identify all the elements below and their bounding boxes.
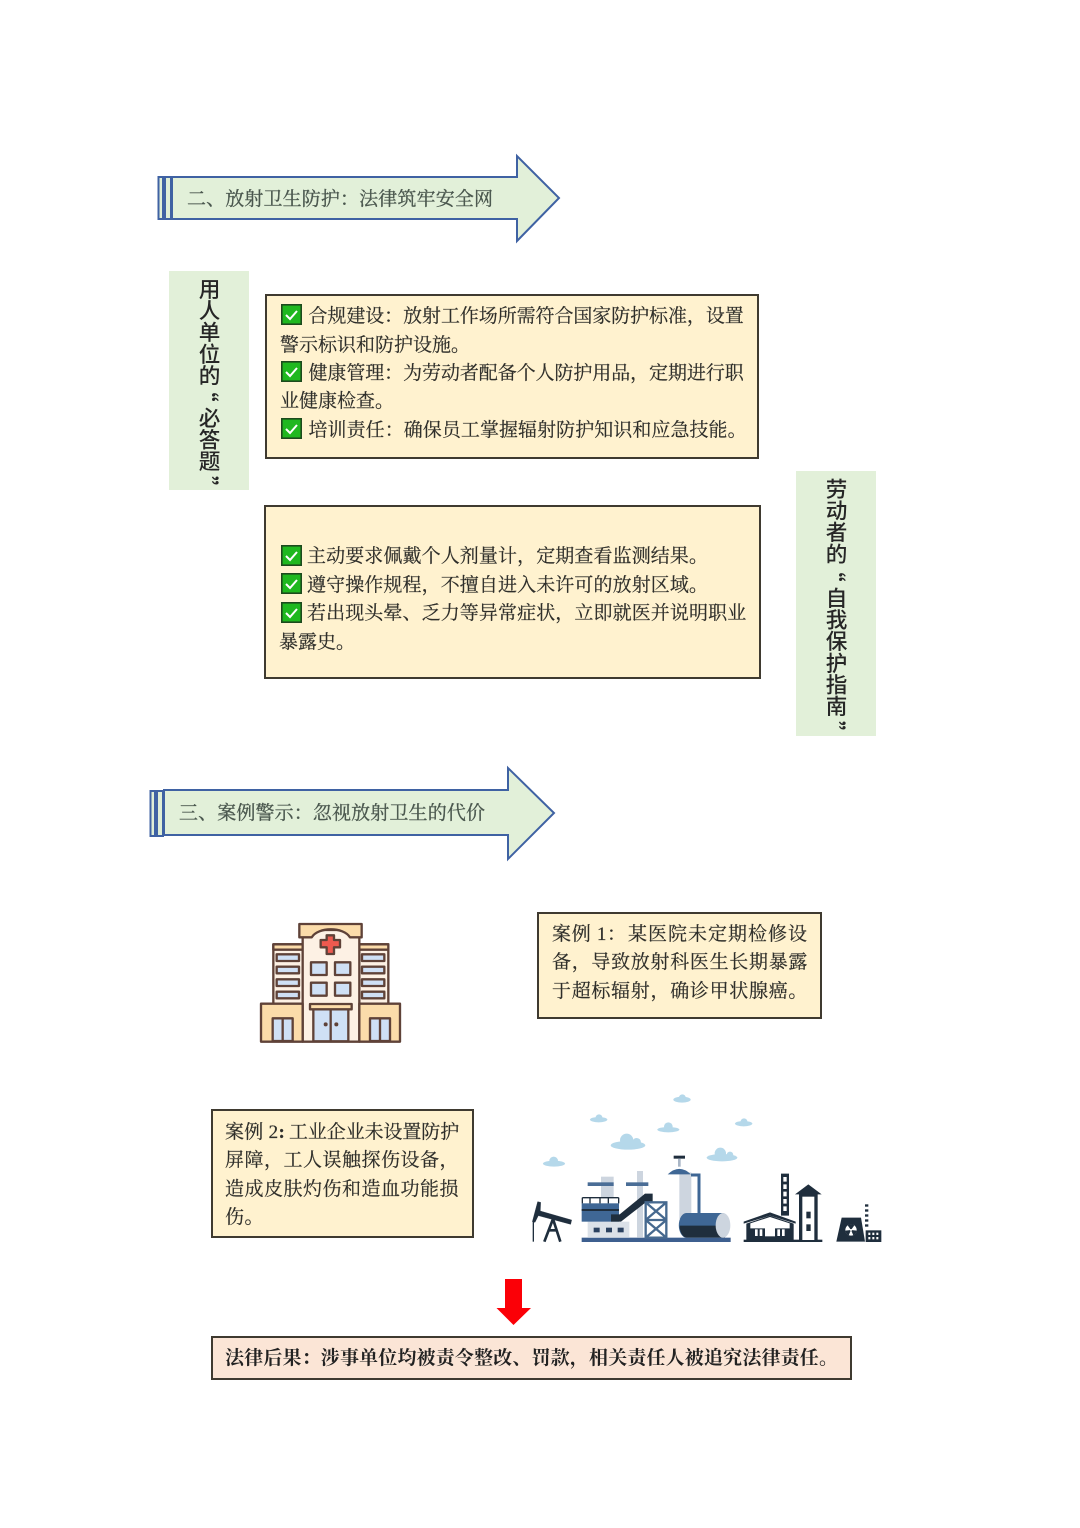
icon: clouds: [543, 1094, 752, 1167]
closing quote: worker: ”: [820, 721, 851, 743]
text line: health management continued: 业健康检查。: [280, 391, 394, 412]
text line: compliance continued: 警示标识和防护设施。: [280, 335, 470, 356]
icon: hospital: [260, 922, 402, 1043]
vertical label text: worker second part: 自我保护指南: [823, 587, 848, 717]
heading text: section two: 二、放射卫生防护：法律筑牢安全网: [187, 189, 493, 210]
vertical label text: worker first part: 劳动者的: [823, 478, 848, 564]
icon: pump jack: [532, 1202, 572, 1242]
heading arrow: section three: [150, 766, 556, 862]
text line: symptoms: 若出现头晕、乏力等异常症状，立即就医并说明职业: [307, 603, 746, 624]
text line: symptoms continued: 暴露史。: [279, 632, 355, 653]
icon: refinery: [582, 1156, 731, 1242]
text line: compliance: 合规建设：放射工作场所需符合国家防护标准，设置: [308, 306, 744, 327]
text line: case 2 second: 屏障，工人误触探伤设备，: [225, 1150, 459, 1171]
icon: workshop and tower: [744, 1174, 822, 1242]
icon: check 5: [281, 573, 302, 594]
icon: check 2: [281, 361, 302, 382]
closing quote: employer: ”: [193, 476, 224, 498]
text line: training: 培训责任：确保员工掌握辐射防护知识和应急技能。: [308, 420, 747, 441]
vertical label text: employer second part: 必答题: [196, 407, 221, 472]
icon: check 3: [281, 418, 302, 439]
panel: case 2: [211, 1109, 474, 1238]
text line: case 2 third: 造成皮肤灼伤和造血功能损: [225, 1179, 459, 1200]
callout: legal consequences: [211, 1336, 852, 1380]
panel: employer side label: [169, 271, 249, 490]
opening quote: employer: “: [193, 380, 224, 402]
panel: worker side label: [796, 471, 876, 736]
text line: case 1 label: 案例 1：: [552, 924, 627, 945]
panel: employer duties: [265, 294, 759, 459]
arrow: red down arrow: [496, 1279, 531, 1325]
text line: case 2 label: 案例 2:: [225, 1122, 285, 1143]
panel: worker guidance: [264, 505, 761, 679]
vertical label text: employer first part: 用人单位的: [196, 278, 221, 386]
icon: check 4: [281, 545, 302, 566]
text line: case 1 second: 备，导致放射科医生长期暴露: [552, 952, 808, 973]
text line: dosimeter: 主动要求佩戴个人剂量计，定期查看监测结果。: [307, 546, 708, 567]
icon: industrial skyline: [532, 1094, 882, 1242]
text line: case 1 first: 某医院未定期检修设: [628, 924, 808, 945]
heading text: section three: 三、案例警示：忽视放射卫生的代价: [179, 803, 485, 824]
text line: case 1 third: 于超标辐射，确诊甲状腺癌。: [552, 981, 808, 1002]
icon: check 6: [281, 602, 302, 623]
icon: nuclear plant: [836, 1204, 881, 1242]
opening quote: worker: “: [820, 560, 851, 582]
panel: case 1: [537, 912, 822, 1019]
icon: check 1: [281, 304, 302, 325]
callout text: 法律后果：涉事单位均被责令整改、罚款，相关责任人被追究法律责任。: [225, 1348, 838, 1369]
text line: case 2 first: 工业企业未设置防护: [289, 1122, 459, 1143]
heading arrow: section two: [158, 154, 560, 244]
text line: case 2 fourth: 伤。: [225, 1207, 264, 1228]
text line: procedures: 遵守操作规程，不擅自进入未许可的放射区域。: [307, 575, 708, 596]
text line: health management: 健康管理：为劳动者配备个人防护用品，定期进行职: [308, 363, 744, 384]
